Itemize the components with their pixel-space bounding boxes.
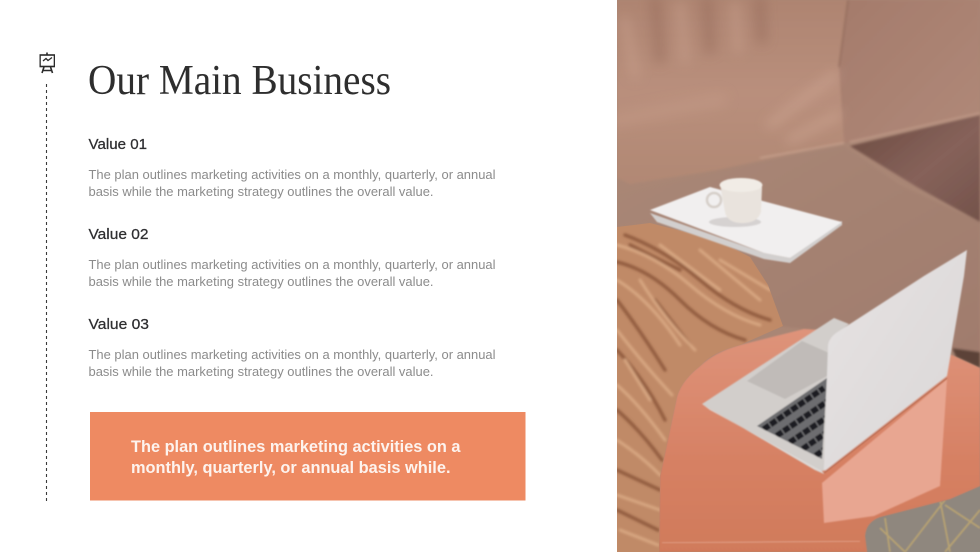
text block: value 03: basis while the marketing strategy outlines the overall value. [88, 364, 434, 379]
dark seat cushion [850, 115, 980, 222]
paper stack [650, 187, 842, 263]
text block: value 01: The plan outlines marketing activities on a monthly, quarterly, or annual [88, 167, 496, 182]
dashed timeline line [46, 84, 48, 501]
sofa folds [652, 4, 824, 137]
screen back [824, 250, 967, 470]
coffee cup [707, 178, 762, 227]
blanket [617, 220, 787, 552]
rug [865, 486, 980, 552]
text block: value 01: basis while the marketing strategy outlines the overall value. [88, 184, 434, 199]
dark gap behind table [952, 348, 980, 368]
left back cushion [617, 25, 843, 180]
text block: value 02 [88, 226, 496, 289]
laptop base [702, 318, 849, 471]
text block: value 03: The plan outlines marketing activities on a monthly, quarterly, or annual [88, 347, 496, 362]
trackpad [747, 341, 829, 399]
text block: value 03: Value 03 [88, 316, 149, 333]
text block: value 02: basis while the marketing strategy outlines the overall value. [88, 274, 434, 289]
text block: value 01: Value 01 [88, 136, 147, 153]
icon: presentation board [40, 52, 54, 73]
keyboard [756, 378, 828, 460]
text block: value 02: Value 02 [88, 226, 148, 243]
text block: value 03 [88, 316, 496, 379]
sofa seat [953, 284, 979, 350]
table reflection [822, 379, 947, 523]
text block: value 02: The plan outlines marketing activities on a monthly, quarterly, or annual [88, 257, 496, 272]
text block: value 01 [88, 136, 496, 199]
table [659, 329, 980, 552]
callout [90, 412, 526, 500]
callout: The plan outlines marketing activities on a [131, 437, 461, 456]
title: Our Main Business [88, 58, 391, 104]
right back cushion [844, 1, 892, 50]
laptop [702, 250, 967, 474]
callout: monthly, quarterly, or annual basis while. [131, 458, 450, 477]
photo: laptop and coffee on a sofa [617, 0, 980, 552]
